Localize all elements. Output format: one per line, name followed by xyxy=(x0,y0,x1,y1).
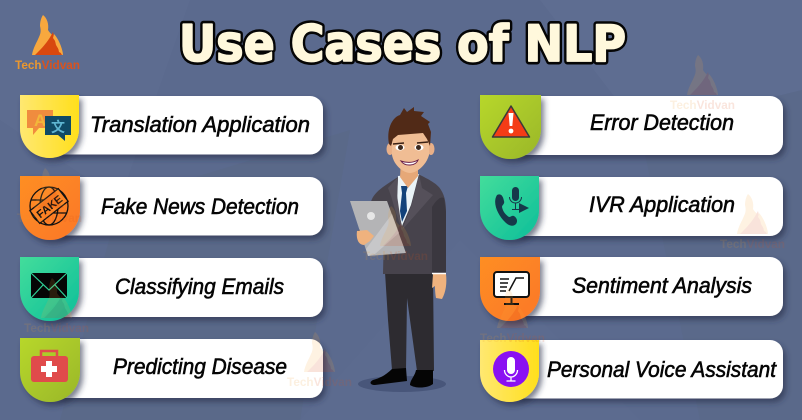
icon: translation bubbles xyxy=(27,110,71,141)
panel: Predicting Disease xyxy=(20,338,323,402)
watermarks: TechVidvan xyxy=(363,251,428,263)
logo: TechVidvan: TechVidvan xyxy=(15,60,80,72)
panel: IVR Application xyxy=(480,176,783,240)
panel: Error Detection xyxy=(480,95,783,159)
shoes xyxy=(371,368,407,385)
left hand xyxy=(357,230,374,245)
icon: medical kit xyxy=(31,351,68,382)
tablet xyxy=(350,201,406,256)
watermarks: TechVidvan xyxy=(720,239,785,251)
label: Fake News Detection xyxy=(101,194,299,219)
eyes xyxy=(396,144,404,150)
right hand xyxy=(432,274,446,299)
mouth xyxy=(401,160,418,165)
illustration: businessman holding a tablet xyxy=(350,107,446,392)
icon: translation bubbles: A xyxy=(34,111,46,130)
neck xyxy=(400,160,418,188)
watermarks: TechVidvan xyxy=(480,333,545,345)
watermarks: TechVidvan xyxy=(287,377,352,389)
panel: Sentiment Analysis xyxy=(480,257,783,321)
jacket xyxy=(358,175,446,274)
label: Personal Voice Assistant xyxy=(547,357,777,382)
title: Use Cases of NLP xyxy=(179,15,626,73)
icon: envelope xyxy=(31,273,67,298)
label: Classifying Emails xyxy=(115,274,284,299)
watermarks: TechVidvan xyxy=(24,323,89,335)
eyebrows xyxy=(393,142,428,144)
tie xyxy=(400,186,408,222)
label: Predicting Disease xyxy=(113,354,287,379)
hair xyxy=(388,107,431,146)
label: Error Detection xyxy=(590,110,734,135)
icon: warning triangle xyxy=(492,106,530,137)
watermarks: TechVidvan xyxy=(670,100,735,112)
label: IVR Application xyxy=(589,192,735,217)
panel: Classifying Emails xyxy=(20,257,323,321)
label: Sentiment Analysis xyxy=(572,273,752,298)
watermarks xyxy=(17,55,785,389)
ears xyxy=(386,143,394,155)
icon: microphone in circle xyxy=(493,351,529,387)
lapels xyxy=(388,174,433,230)
panel: Fake News Detection xyxy=(20,176,323,240)
shirt xyxy=(397,174,419,226)
icon: fake news globe: FAKE xyxy=(35,193,65,221)
icon: phone with microphone xyxy=(495,187,529,226)
icon: fake news globe xyxy=(30,187,68,225)
face xyxy=(392,132,429,173)
logo: TechVidvan xyxy=(15,15,80,72)
panel: Translation Application xyxy=(20,95,323,158)
label: Translation Application xyxy=(90,112,310,137)
title: Use Cases of NLP xyxy=(179,15,626,73)
watermarks: TechVidvan xyxy=(17,213,82,225)
legs xyxy=(385,272,434,371)
panel: Personal Voice Assistant xyxy=(480,340,783,402)
icon: translation bubbles: 文 xyxy=(51,119,65,135)
icon: monitor with chart xyxy=(494,272,529,304)
shadow xyxy=(358,376,446,392)
